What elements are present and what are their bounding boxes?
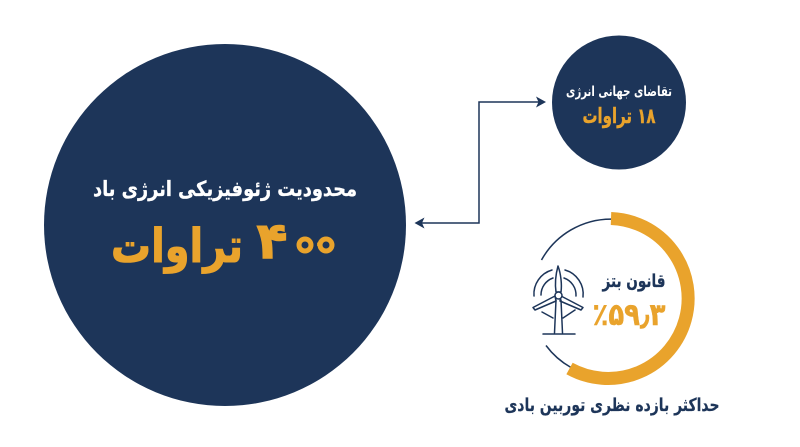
value: 18 terawatts: ۱۸ تراوات (582, 104, 656, 128)
caption: maximum theoretical turbine efficiency: حداکثر بازده نظری توربین بادی (504, 395, 720, 416)
arrow: connector between circles (414, 96, 546, 228)
panel: geophysical limit circle (44, 44, 406, 406)
value: number 400: ۴ (257, 212, 287, 270)
heading: global energy demand: تقاضای جهانی انرژی (566, 84, 672, 100)
icon: wind turbine (533, 266, 583, 334)
value: number 400 (257, 212, 334, 270)
value: number 400: ۰۰ (305, 231, 325, 255)
value: terawatts word: تراوات (111, 219, 243, 274)
label: Betz law: قانون بتز (602, 271, 666, 292)
heading: geophysical limit: محدودیت ژئوفیزیکی انرژی باد (93, 177, 357, 201)
chart: Betz limit ring gauge (542, 218, 688, 378)
value: 59.3 percent: ٪۵۹٫۳ (592, 297, 666, 333)
panel: global energy demand circle (552, 36, 686, 170)
